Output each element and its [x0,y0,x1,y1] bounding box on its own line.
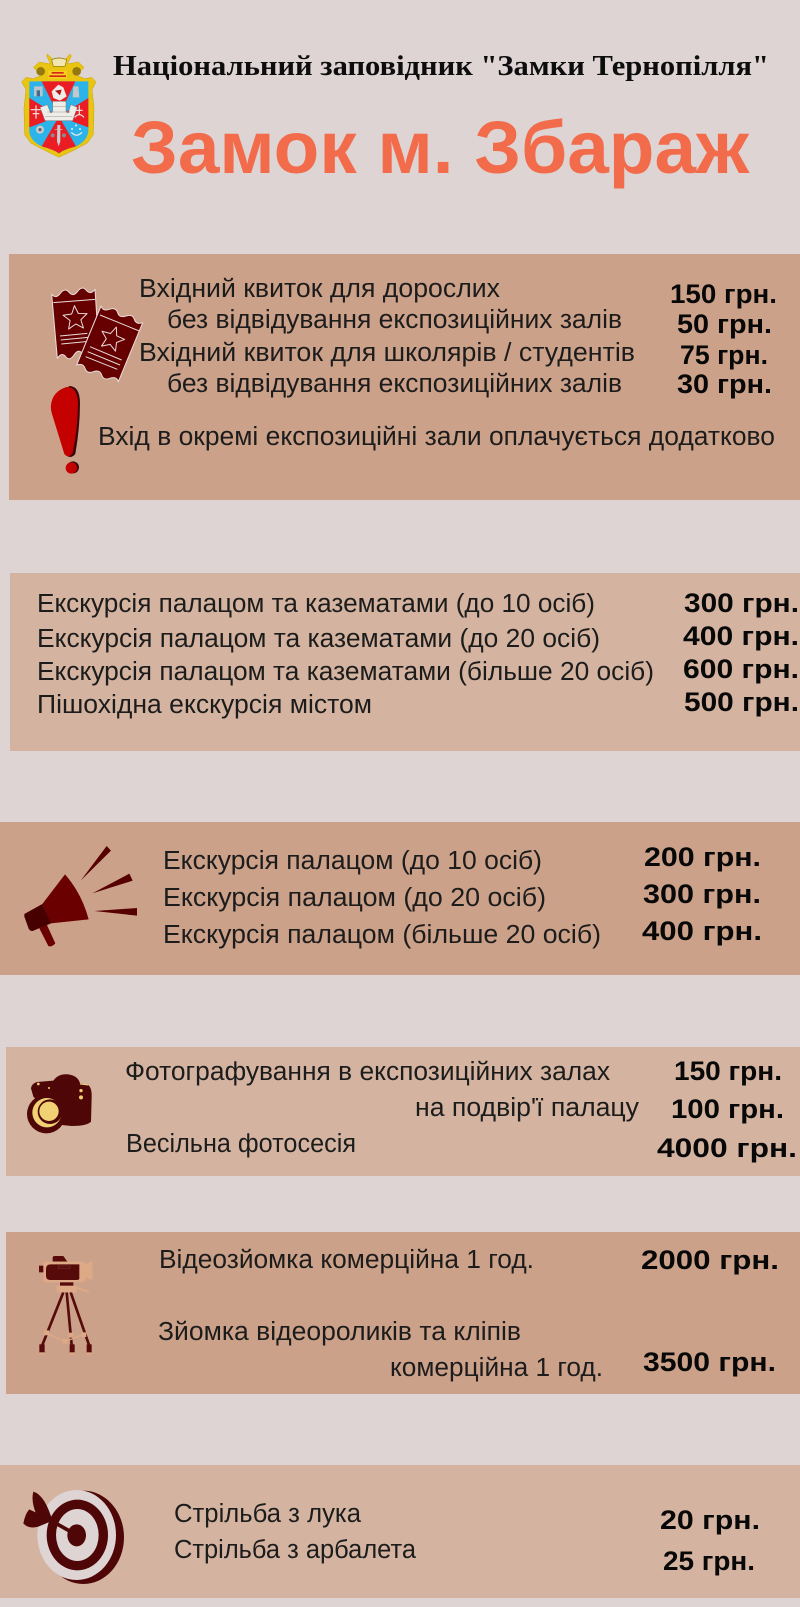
video prices [641,1245,779,1377]
ticket prices [670,279,777,399]
tour prices: 500 грн. [684,687,799,717]
tour prices: 600 грн. [683,654,799,684]
photography prices [657,1056,797,1163]
guided tour descriptions: Екскурсія палацом (більше 20 осіб) [163,921,601,949]
guided tour descriptions: Екскурсія палацом (до 20 осіб) [163,884,546,912]
video prices: 3500 грн. [643,1347,776,1377]
ticket prices: 150 грн. [670,279,777,309]
tour descriptions: Екскурсія палацом та казематами (до 20 осіб) [37,625,600,653]
archery prices [660,1505,760,1576]
photography prices: 150 грн. [674,1056,782,1086]
archery descriptions: Стрільба з лука [174,1500,362,1528]
title: Замок м. Збараж [131,106,751,189]
tour prices [683,588,799,717]
icon: tickets [52,288,143,382]
ticket prices: 30 грн. [677,369,772,399]
video descriptions: Відеозйомка комерційна 1 год. [159,1246,534,1274]
archery prices: 25 грн. [663,1546,755,1576]
ticket prices: 50 грн. [677,309,772,339]
video prices: 2000 грн. [641,1245,779,1275]
video descriptions: комерційна 1 год. [390,1354,603,1382]
icon: megaphone [24,846,137,946]
tour descriptions: Пішохідна екскурсія містом [37,691,372,719]
icon: target with arrow [23,1490,124,1584]
archery descriptions [174,1500,417,1564]
guided tour prices: 200 грн. [644,842,761,872]
tour prices: 300 грн. [684,588,799,618]
header [22,50,769,189]
icon: video camera on tripod [39,1256,92,1354]
icon: camera [27,1074,92,1133]
photography prices: 4000 грн. [657,1133,797,1163]
photography descriptions: Фотографування в експозиційних залах [125,1058,610,1086]
guided tour descriptions [163,847,601,949]
panel: archery [0,1465,800,1598]
guided tour descriptions: Екскурсія палацом (до 10 осіб) [163,847,542,875]
guided tour prices: 400 грн. [642,916,762,946]
photography prices: 100 грн. [671,1094,784,1124]
panel: entry tickets [9,254,800,500]
photography descriptions: на подвір'ї палацу [415,1094,639,1122]
ticket descriptions [139,275,635,398]
panel: video [6,1232,800,1394]
panel: photography [6,1047,800,1176]
video descriptions [158,1246,603,1382]
tour descriptions: Екскурсія палацом та казематами (до 10 осіб) [37,590,595,618]
tour descriptions: Екскурсія палацом та казематами (більше 20 осіб) [37,658,654,686]
panel: palace and casemates tours [10,573,800,751]
ticket descriptions: Вхідний квиток для дорослих [139,275,500,303]
notice: Вхід в окремі експозиційні зали оплачується додатково [98,423,775,451]
tour prices: 400 грн. [683,621,799,651]
archery prices: 20 грн. [660,1505,760,1535]
tour descriptions [37,590,654,719]
ticket descriptions: без відвідування експозиційних залів [167,306,622,334]
icon: coat of arms [22,54,96,157]
guided tour prices: 300 грн. [643,879,761,909]
guided tour prices [642,842,762,946]
ticket prices: 75 грн. [680,340,768,370]
photography descriptions [125,1058,639,1158]
subtitle: Національний заповідник "Замки Тернопілля" [113,50,769,82]
panel: palace tours [0,822,800,975]
icon: exclamation mark [51,386,80,474]
ticket descriptions: без відвідування експозиційних залів [167,370,622,398]
photography descriptions: Весільна фотосесія [126,1130,356,1158]
ticket descriptions: Вхідний квиток для школярів / студентів [139,339,635,367]
archery descriptions: Стрільба з арбалета [174,1536,417,1564]
video descriptions: Зйомка відеороликів та кліпів [158,1318,521,1346]
